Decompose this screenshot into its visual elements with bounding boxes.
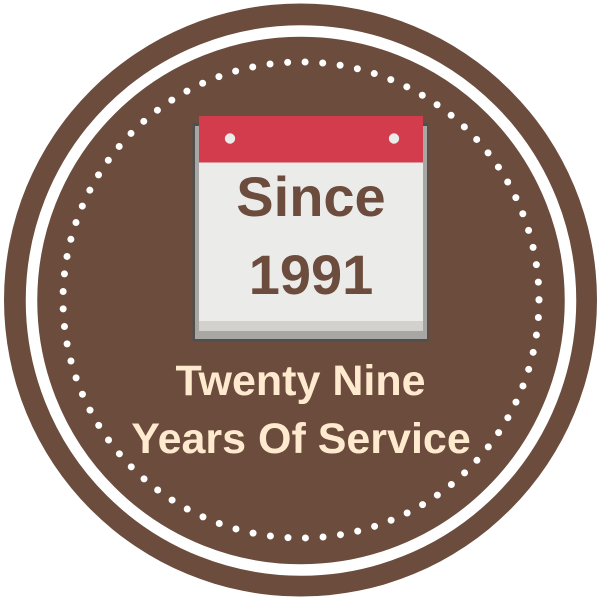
calendar text: Since: Since xyxy=(236,165,386,228)
caption line 2: Years Of Service xyxy=(131,415,471,463)
calendar text: 1991: 1991 xyxy=(249,243,373,306)
dotted ring xyxy=(63,62,539,538)
icon: calendar xyxy=(192,116,428,342)
calendar back frame xyxy=(192,123,428,342)
caption line 1: Twenty Nine xyxy=(175,357,426,405)
calendar hole right xyxy=(389,133,399,144)
calendar paper xyxy=(199,160,423,321)
calendar hole left xyxy=(225,133,235,144)
calendar paper fold xyxy=(199,321,423,331)
calendar red header xyxy=(199,116,423,162)
calendar back page xyxy=(195,126,427,339)
